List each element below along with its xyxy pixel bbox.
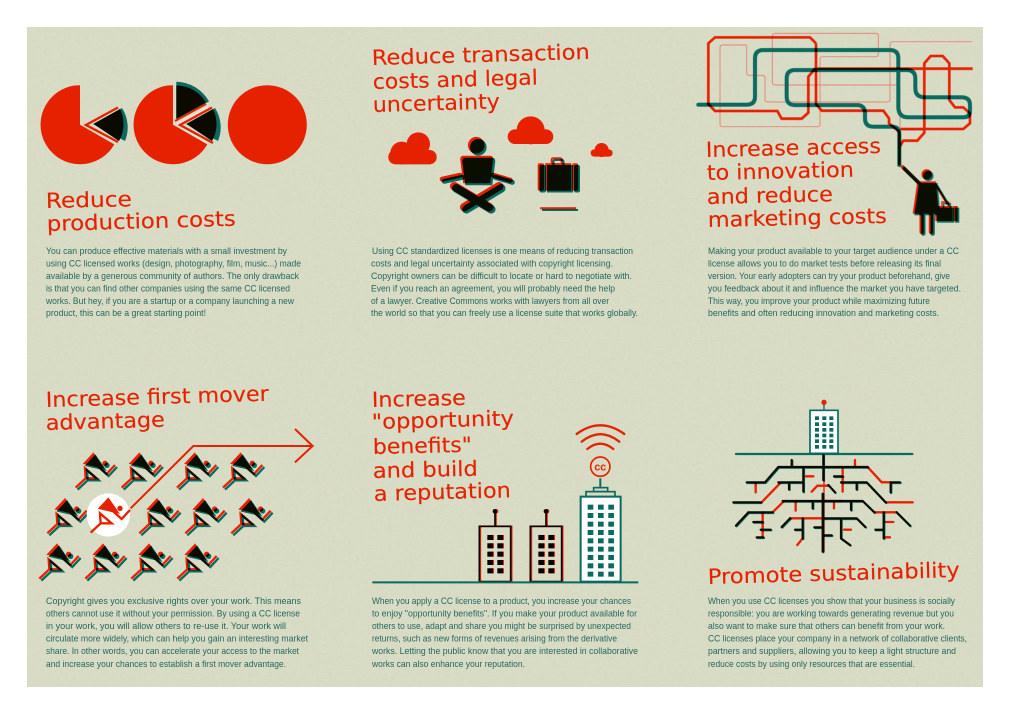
pie charts — [41, 82, 307, 164]
arrow — [131, 429, 313, 508]
body text — [45, 245, 301, 318]
heading: increase opportunity benefits and build a reputation: a reputation — [373, 478, 511, 506]
body text: available by a generous community of authors. The only drawback — [46, 270, 299, 281]
body text: product, this can be a great starting point! — [46, 307, 206, 318]
body text: circulate more widely, which can help you gain an interesting market — [46, 632, 308, 644]
second pie with two wedges removed — [134, 82, 221, 164]
body text: license allows you to do market tests before releasing its final — [708, 258, 941, 268]
panel: increase access to innovation — [698, 33, 973, 318]
body text: costs and legal uncertainty associated with copyright licensing. — [371, 258, 613, 268]
heading: reduce transaction costs and legal uncertainty: uncertainty — [372, 89, 500, 117]
body text: partners and suppliers, allowing you to keep a light structure and — [708, 645, 956, 656]
icon: lead runner in white circle — [87, 493, 130, 537]
heading: increase access to innovation and reduce marketing costs: to innovation — [707, 158, 854, 185]
panel: promote sustainability — [707, 400, 967, 669]
panel: increase first mover advantage — [39, 382, 313, 669]
body text: is that you can find other companies using the same CC licensed — [46, 282, 290, 294]
body text: Copyright owners can be difficult to locate or hard to negotiate with. — [371, 270, 632, 281]
heading: promote sustainability: Promote sustainability — [707, 558, 960, 589]
body text: version. Your early adopters can try your product beforehand, give — [708, 270, 950, 281]
body text: You can produce effective materials with a small investment by — [46, 245, 287, 256]
diagram: tangled metro lines and woman — [698, 33, 973, 234]
body text: works. Letting the public know that you are interested in collaborative — [371, 645, 638, 656]
small tower one — [479, 509, 512, 582]
body text: returns, such as new forms of revenues arising from the derivative — [372, 632, 617, 644]
body text: of a lawyer. Creative Commons works with lawyers from all over — [371, 295, 609, 306]
heading: increase access to innovation and reduce marketing costs: marketing costs — [708, 204, 887, 232]
roots network — [733, 455, 913, 552]
first pie with one wedge removed — [41, 85, 128, 164]
icon: cc badge: cc — [594, 461, 606, 473]
body text: works. But hey, if you are a startup or a company launching a new — [45, 295, 294, 306]
panel: reduce transaction costs — [371, 40, 638, 318]
diagram: runners with leader and arrow — [39, 429, 313, 581]
body text: also want to make sure that others can benefit from your work. — [708, 620, 945, 631]
icon: woman with briefcase — [903, 167, 959, 234]
body text: Using CC standardized licenses is one means of reducing transaction — [372, 245, 633, 256]
body text — [371, 595, 638, 669]
icon: office building — [810, 400, 838, 453]
body text: This way, you improve your product while maximizing future — [708, 295, 930, 306]
icon: signal waves — [577, 425, 624, 449]
ground line — [372, 579, 638, 585]
panel: increase opportunity benefits — [371, 386, 638, 669]
heading: increase access to innovation and reduce marketing costs: and reduce — [707, 182, 833, 209]
icon: suitcase — [538, 158, 580, 211]
body text — [46, 595, 308, 669]
body text: others cannot use it without your permission. By using a CC license — [46, 608, 300, 618]
illustration: building with roots network — [733, 400, 913, 552]
heading: increase opportunity benefits and build a reputation: and build — [373, 457, 478, 483]
heading: reduce transaction costs and legal uncertainty: costs and legal — [372, 65, 538, 94]
illustration: buildings — [372, 425, 638, 582]
body text: Making your product available to your target audience under a CC — [708, 245, 959, 256]
small tower two — [530, 509, 563, 582]
body text: reduce costs by using only resources that are essential. — [708, 658, 915, 669]
body text: Even if you reach an agreement, you will probably need the help — [371, 282, 615, 294]
heading: increase opportunity benefits and build a reputation: "opportunity — [372, 406, 514, 434]
body text: Copyright gives you exclusive rights over your work. This means — [46, 595, 301, 606]
body text — [371, 245, 638, 318]
heading: reduce production costs: Reduce — [46, 187, 132, 213]
panel: reduce production costs — [41, 82, 307, 318]
heading: reduce production costs: production costs — [46, 207, 236, 236]
heading: increase first mover advantage: Increase first mover — [45, 382, 269, 412]
body text: When you use CC licenses you show that your business is socially — [708, 595, 955, 606]
body text: When you apply a CC license to a product, you increase your chances — [372, 595, 631, 606]
heading: increase opportunity benefits and build a reputation — [372, 386, 514, 506]
body text: and increase your chances to establish a first mover advantage. — [46, 658, 286, 669]
heading: reduce production costs — [46, 187, 236, 236]
icon: clouds — [388, 116, 613, 164]
ground line — [736, 450, 912, 457]
body text: you feedback about it and influence the market you have targeted. — [708, 282, 961, 294]
body text: responsible: you are working towards generating revenue but you — [708, 608, 954, 618]
body text — [708, 245, 961, 318]
icon: meditating person — [442, 137, 512, 209]
heading: increase opportunity benefits and build a reputation: benefits" — [373, 433, 472, 459]
heading: increase first mover advantage: advantage — [45, 408, 165, 435]
body text: benefits and often reducing innovation and marketing costs. — [708, 307, 939, 318]
body text: works can also enhance your reputation. — [371, 658, 525, 669]
heading: increase access to innovation and reduce marketing costs: Increase access — [706, 134, 881, 162]
icon: runners crowd — [39, 454, 273, 581]
heading: increase access to innovation and reduce marketing costs — [706, 134, 887, 232]
heading: increase opportunity benefits and build a reputation: Increase — [372, 386, 466, 412]
heading: increase first mover advantage — [45, 382, 269, 435]
body text: CC licenses place your company in a network of collaborative clients, — [708, 632, 967, 644]
third whole pie — [228, 85, 307, 164]
heading: reduce transaction costs and legal uncertainty — [371, 40, 590, 117]
heading: reduce transaction costs and legal uncertainty: Reduce transaction — [371, 40, 590, 70]
body text — [708, 595, 967, 669]
body text: in your work, you will allow others to re-use it. Your work will — [46, 620, 286, 631]
icon: cc badge — [591, 457, 610, 476]
body text: to enjoy "opportunity benefits". If you make your product available for — [372, 608, 637, 618]
body text: using CC licensed works (design, photography, film, music...) made — [46, 258, 301, 268]
body text: others to use, adapt and share you might be surprised by unexpected — [372, 620, 631, 631]
body text: the world so that you can freely use a license suite that works globally. — [371, 307, 638, 318]
body text: share. In other words, you can accelerate your access to the market — [46, 645, 299, 656]
tall CC tower — [581, 478, 621, 582]
